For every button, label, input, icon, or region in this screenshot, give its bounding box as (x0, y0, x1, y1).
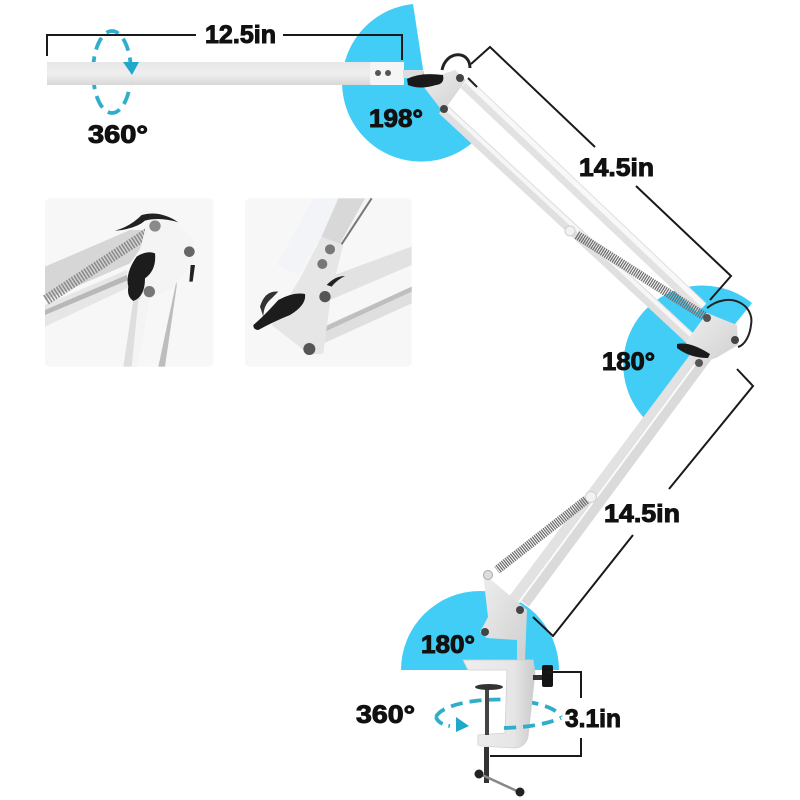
dimension line: upper 14.5in (471, 47, 731, 300)
photo panel: spring joint detail (45, 198, 213, 367)
label: 3.1in: 3.1in (565, 705, 621, 733)
upper arm pair (443, 81, 704, 340)
label: elbow 180 degrees: 180° (602, 348, 655, 376)
dimension line: 12.5in (47, 35, 402, 60)
spring: lower arm (497, 492, 596, 570)
label: base 180 degrees: 180° (421, 631, 475, 659)
label: top 360 degrees: 360° (88, 121, 148, 149)
label: 12.5in: 12.5in (205, 21, 276, 49)
arrowhead: top rotation (123, 62, 139, 75)
label: lower 14.5in: 14.5in (604, 500, 680, 528)
elbow joint plate and knob (677, 300, 751, 367)
dimension line: 3.1in (490, 672, 581, 756)
label: upper 14.5in: 14.5in (579, 154, 654, 182)
rotation arrow: top 360 degrees (93, 31, 131, 113)
wedge: base joint 180 degrees (401, 591, 559, 670)
label: bottom 360 degrees: 360° (356, 701, 415, 729)
dimension line: lower 14.5in (533, 369, 753, 636)
wedge: top joint 198 degrees (342, 4, 472, 162)
rotation arrow: back of base 360 degrees (436, 700, 561, 717)
horizontal top arm (47, 62, 423, 85)
spring: upper arm (565, 226, 704, 316)
wedge: elbow joint 180 degrees (623, 286, 752, 419)
lower arm pair (514, 354, 708, 603)
desk clamp base (463, 570, 553, 796)
top joint plate and knob (407, 55, 477, 113)
label: 198 degrees: 198° (369, 105, 423, 133)
photo panel: knob joint detail (245, 198, 412, 367)
rotation arrow: front of base 360 degrees (436, 717, 561, 732)
